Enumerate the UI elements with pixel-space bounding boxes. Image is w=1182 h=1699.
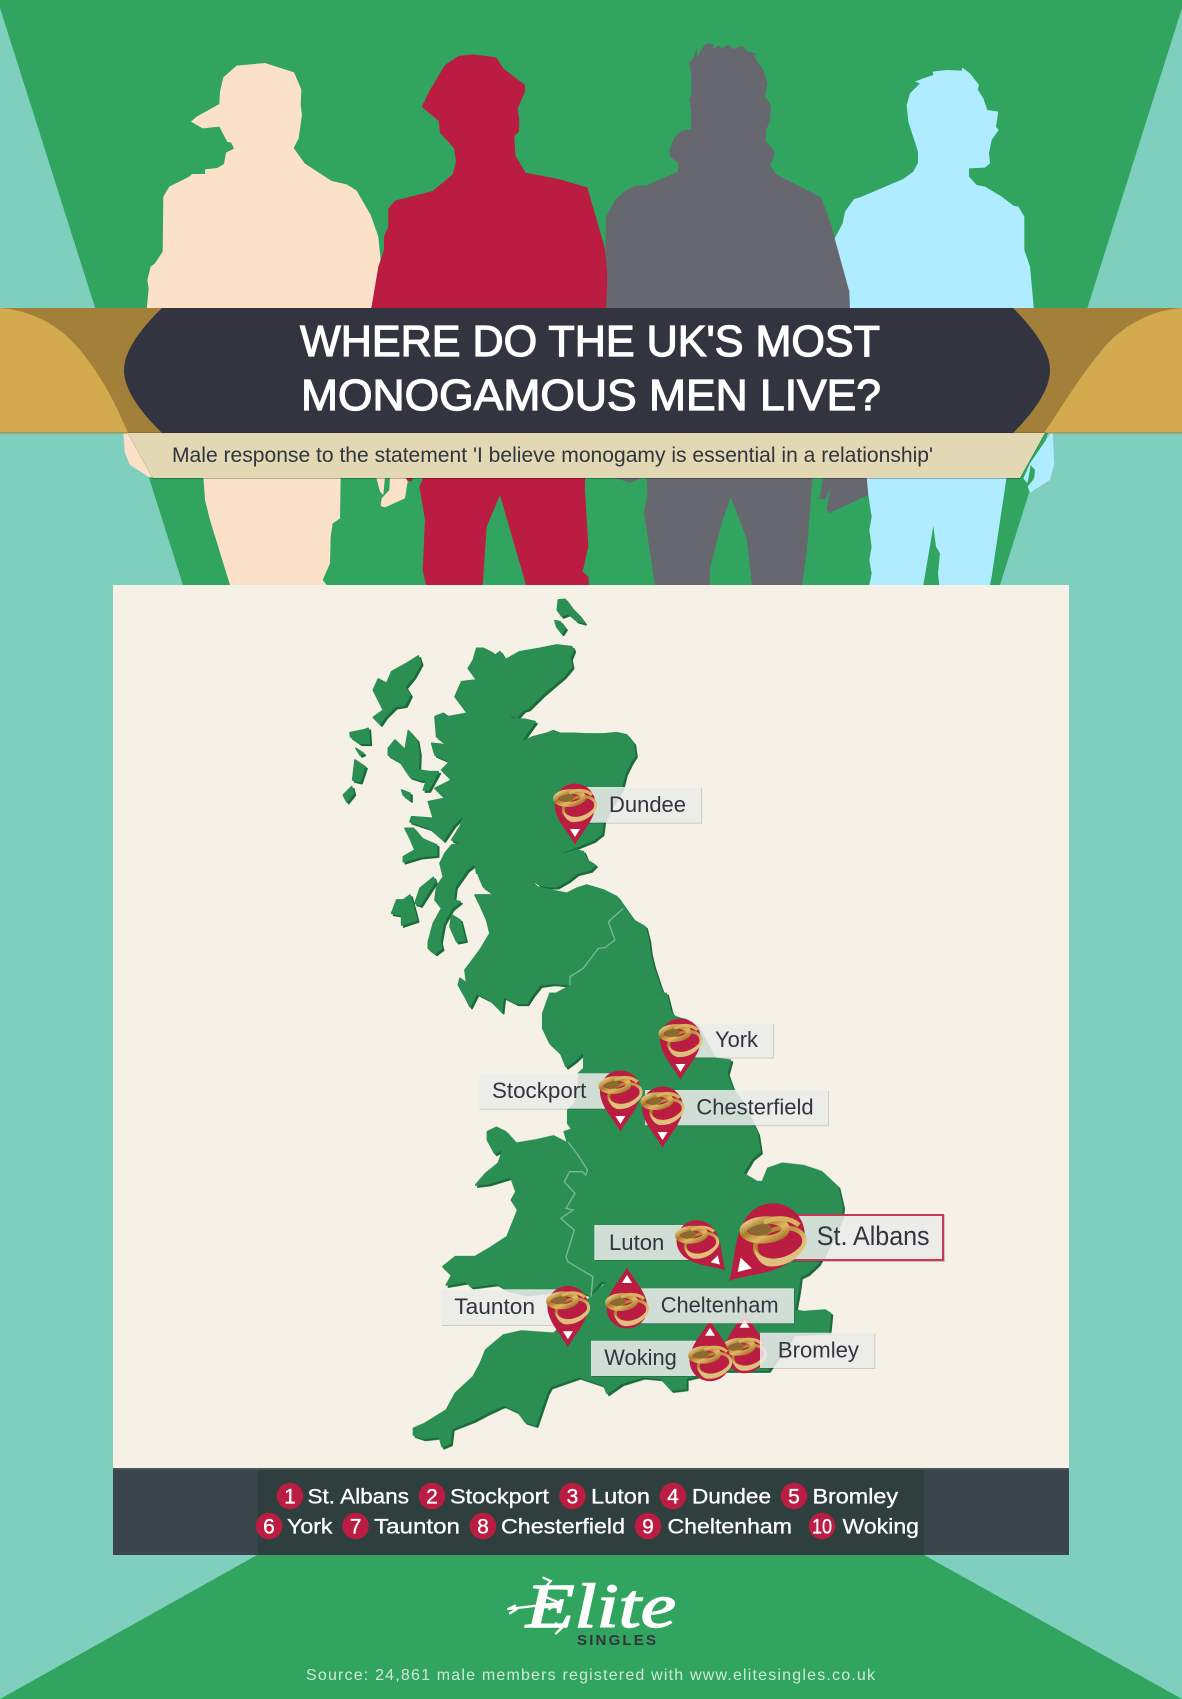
label: Dundee [587, 787, 701, 823]
green bottom beam [0, 1555, 1182, 1699]
label: Woking: Woking [604, 1345, 677, 1370]
silhouette: peach man [123, 63, 408, 585]
band: gold left curve [0, 308, 128, 433]
legend row 2: 10 [812, 1516, 832, 1538]
legend row 1: 3 [567, 1486, 578, 1508]
title band [0, 308, 1182, 434]
pin: Cheltenham [606, 1267, 650, 1329]
map: England and Wales [414, 993, 842, 1447]
label: Chesterfield: Chesterfield [696, 1094, 814, 1119]
logo: Elite Singles [508, 1573, 676, 1649]
label: York [682, 1023, 773, 1058]
silhouette: red man [371, 54, 608, 585]
legend row 1: 4 [667, 1486, 679, 1508]
border: Scotland and England [570, 908, 623, 985]
label: Stockport [479, 1073, 617, 1109]
legend row 2: York [287, 1516, 333, 1538]
pin: Woking [690, 1320, 733, 1381]
legend row 2: Taunton [374, 1516, 460, 1538]
pin: Bromley [724, 1312, 768, 1373]
legend row 1 [277, 1483, 899, 1509]
subtitle ribbon [128, 433, 1045, 478]
legend row 1: 5 [788, 1486, 800, 1508]
legend row 2: 8 [477, 1516, 489, 1538]
legend row 1: Luton [591, 1486, 650, 1508]
label: St. Albans [780, 1215, 943, 1260]
pin: Stockport [600, 1070, 643, 1132]
legend row 1: Dundee [692, 1486, 771, 1508]
green top light beam [0, 0, 1182, 585]
logo arrows [508, 1578, 561, 1633]
label: Luton [594, 1225, 694, 1260]
label: Cheltenham: Cheltenham [661, 1293, 779, 1318]
pin: Luton [668, 1212, 740, 1285]
label: Woking [591, 1341, 696, 1376]
legend row 1: 1 [284, 1486, 296, 1508]
map card [113, 585, 1069, 1469]
pin: Chesterfield [642, 1086, 686, 1148]
source: Source: 24,861 male members registered with www.elitesingles.co.uk [306, 1667, 876, 1684]
label: Taunton [441, 1289, 561, 1325]
pin: York [660, 1018, 703, 1080]
logo wordmark: Elite [525, 1573, 676, 1641]
legend row 2 [256, 1513, 919, 1539]
band: gold right curve [1044, 308, 1182, 433]
label: York: York [715, 1027, 759, 1052]
label: Bromley [760, 1333, 874, 1368]
city markers and labels [441, 783, 943, 1381]
label: Stockport: Stockport [492, 1078, 586, 1103]
map of the UK [343, 599, 842, 1447]
label: Chesterfield [645, 1090, 828, 1125]
label: Dundee: Dundee [609, 792, 686, 817]
silhouette: grey man [606, 43, 868, 585]
title: WHERE DO THE UK'S MOST [300, 317, 880, 366]
band: dark pill [124, 308, 1050, 433]
pin: Taunton [547, 1286, 591, 1347]
label: St. Albans: St. Albans [817, 1221, 930, 1251]
title [300, 317, 881, 420]
subtitle: Male response to the statement 'I believe monogamy is essential in a relationship' [172, 444, 933, 467]
legend row 1: Stockport [450, 1486, 549, 1508]
legend row 2: Chesterfield [501, 1516, 625, 1538]
pin: Dundee [554, 783, 598, 845]
band: dark gold base [0, 308, 1182, 433]
border: Wales and England [561, 1142, 593, 1297]
legend row 2: 9 [642, 1516, 654, 1538]
pin: St. Albans [706, 1190, 818, 1303]
silhouette: blue man [835, 68, 1054, 585]
map: Scottish islands [343, 599, 584, 942]
label: Bromley: Bromley [778, 1337, 859, 1362]
legend row 1: 2 [426, 1486, 438, 1508]
label: Cheltenham [630, 1288, 794, 1323]
logo SINGLES: SINGLES [577, 1632, 656, 1649]
legend row 1: St. Albans [308, 1486, 409, 1508]
label: Luton: Luton [609, 1230, 664, 1255]
label: Taunton: Taunton [454, 1294, 535, 1319]
legend row 2: 6 [263, 1516, 275, 1538]
legend row 2: Cheltenham [668, 1516, 792, 1538]
legend row 2: Woking [842, 1516, 919, 1538]
legend row 1: Bromley [812, 1486, 899, 1508]
legend bar [113, 1468, 1069, 1555]
map: Scotland and northern England [410, 645, 687, 1028]
legend row 2: 7 [350, 1516, 361, 1538]
silhouettes: four men [123, 43, 1054, 585]
title: MONOGAMOUS MEN LIVE? [301, 371, 881, 420]
